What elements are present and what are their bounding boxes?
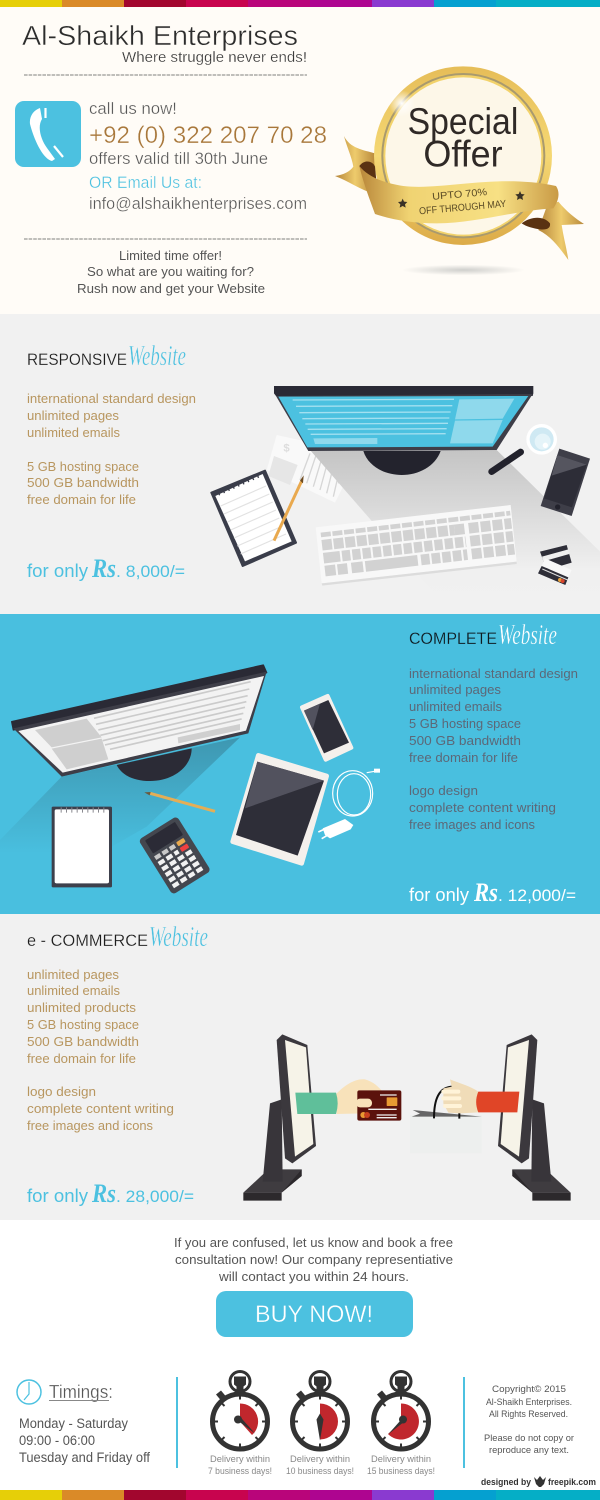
feature list	[27, 392, 196, 507]
feature list: free domain for life	[27, 493, 136, 507]
limited time offer text: So what are you waiting for?	[87, 264, 254, 279]
freepik credit	[481, 1476, 596, 1487]
stopwatch: 7 days	[208, 1372, 272, 1477]
title: company name: Al-Shaikh Enterprises	[22, 20, 298, 51]
button: buy now: BUY NOW!	[255, 1301, 373, 1328]
feature list: unlimited pages	[27, 968, 119, 982]
feature list: complete content writing	[409, 801, 556, 815]
consultation text	[174, 1235, 453, 1284]
feature list: unlimited emails	[409, 700, 502, 714]
feature list: free domain for life	[27, 1052, 136, 1066]
special offer badge: Offer	[423, 133, 503, 175]
feature list: unlimited emails	[27, 426, 120, 440]
timings heading: Timings:	[49, 1382, 113, 1402]
illustration: desktop workspace: $	[283, 443, 290, 455]
limited time offer text	[77, 248, 265, 296]
price: Rs	[473, 878, 498, 907]
price: . 28,000/=	[116, 1187, 194, 1206]
heading: complete website	[409, 620, 557, 651]
price	[409, 878, 576, 907]
feature list: logo design	[27, 1085, 96, 1099]
price: for only	[27, 1186, 88, 1206]
feature list: free domain for life	[409, 751, 518, 765]
price	[27, 1179, 194, 1208]
special offer badge: UPTO 70%	[432, 187, 488, 203]
feature list: unlimited products	[27, 1001, 136, 1015]
heading: responsive website: Website	[128, 341, 186, 372]
feature list: free images and icons	[409, 818, 535, 832]
icon: telephone	[15, 101, 81, 167]
price: . 12,000/=	[498, 886, 576, 905]
feature list: unlimited pages	[27, 409, 119, 423]
feature list: unlimited pages	[409, 683, 501, 697]
feature list: logo design	[409, 784, 478, 798]
copyright text: All Rights Reserved.	[489, 1409, 568, 1420]
copyright text: reproduce any text.	[489, 1445, 569, 1456]
heading: e-commerce website: Website	[149, 922, 208, 953]
stopwatch: 15 days: 15 business days!	[367, 1466, 435, 1477]
price: Rs	[91, 554, 116, 583]
illustration: monitor and devices	[0, 665, 380, 895]
copyright text: Please do not copy or	[484, 1433, 574, 1444]
button: buy now	[216, 1291, 413, 1337]
heading: complete website: COMPLETE	[409, 630, 497, 648]
stopwatch: 7 days: 7 business days!	[208, 1466, 272, 1477]
freepik credit: designed by	[481, 1477, 531, 1487]
price	[27, 554, 185, 583]
stopwatch: 15 days: Delivery within	[371, 1454, 431, 1465]
timings text	[19, 1416, 150, 1465]
feature list: 5 GB hosting space	[27, 460, 139, 474]
feature list: free images and icons	[27, 1119, 153, 1133]
feature list	[409, 667, 578, 832]
bottom colour bar	[0, 1490, 600, 1500]
panel: responsive website	[27, 341, 600, 600]
limited time offer text: Rush now and get your Website	[77, 281, 265, 296]
special offer badge	[335, 66, 584, 275]
feature list: unlimited emails	[27, 984, 120, 998]
heading: complete website: Website	[498, 620, 557, 651]
consultation text: If you are confused, let us know and book a free	[174, 1235, 453, 1250]
freepik credit: freepik.com	[548, 1477, 596, 1487]
special offer badge: Special	[408, 100, 518, 142]
feature list: international standard design	[409, 667, 578, 681]
consultation text: consultation now! Our company representiative	[175, 1252, 453, 1267]
contact text block: offers valid till 30th June	[89, 149, 268, 168]
heading: responsive website	[27, 341, 186, 372]
stopwatch: 15 days	[367, 1372, 435, 1477]
timings text: 09:00 - 06:00	[19, 1433, 95, 1448]
feature list: 500 GB bandwidth	[409, 734, 521, 748]
stopwatch: 10 days	[286, 1372, 354, 1477]
feature list: international standard design	[27, 392, 196, 406]
top colour bar	[0, 0, 600, 7]
price: Rs	[91, 1179, 116, 1208]
limited time offer text: Limited time offer!	[119, 248, 222, 263]
illustration: online shopping monitors	[243, 1034, 571, 1201]
tagline: Where struggle never ends!	[122, 49, 307, 66]
stopwatch: 10 days: Delivery within	[290, 1454, 350, 1465]
timings text: Monday - Saturday	[19, 1416, 128, 1431]
heading: e-commerce website: e - COMMERCE	[27, 932, 148, 950]
contact text block: OR Email Us at:	[89, 173, 202, 192]
copyright text	[484, 1384, 574, 1456]
feature list: 5 GB hosting space	[27, 1018, 139, 1032]
stopwatch: 7 days: Delivery within	[210, 1454, 270, 1465]
contact text block: info@alshaikhenterprises.com	[89, 194, 307, 213]
heading: responsive website: RESPONSIVE	[27, 351, 127, 369]
illustration: desktop workspace	[211, 386, 600, 600]
feature list	[27, 968, 174, 1133]
contact text block: +92 (0) 322 207 70 28	[89, 122, 327, 149]
price: for only	[27, 561, 88, 581]
contact text block: call us now!	[89, 99, 177, 118]
timings text: Tuesday and Friday off	[19, 1450, 150, 1465]
panel: e-commerce website	[27, 922, 571, 1208]
copyright text: Al-Shaikh Enterprises.	[486, 1397, 572, 1408]
heading: e-commerce website	[27, 922, 208, 953]
feature list: complete content writing	[27, 1102, 174, 1116]
stopwatch: 10 days: 10 business days!	[286, 1466, 354, 1477]
icon: clock	[17, 1380, 41, 1404]
copyright text: Copyright© 2015	[492, 1384, 566, 1395]
price: . 8,000/=	[116, 562, 185, 581]
special offer badge: OFF THROUGH MAY	[419, 199, 507, 217]
feature list: 500 GB bandwidth	[27, 476, 139, 490]
price: for only	[409, 885, 469, 905]
feature list: 5 GB hosting space	[409, 717, 521, 731]
contact text block	[89, 99, 327, 213]
consultation text: will contact you within 24 hours.	[218, 1269, 409, 1284]
feature list: 500 GB bandwidth	[27, 1035, 139, 1049]
panel: complete website	[0, 620, 578, 907]
